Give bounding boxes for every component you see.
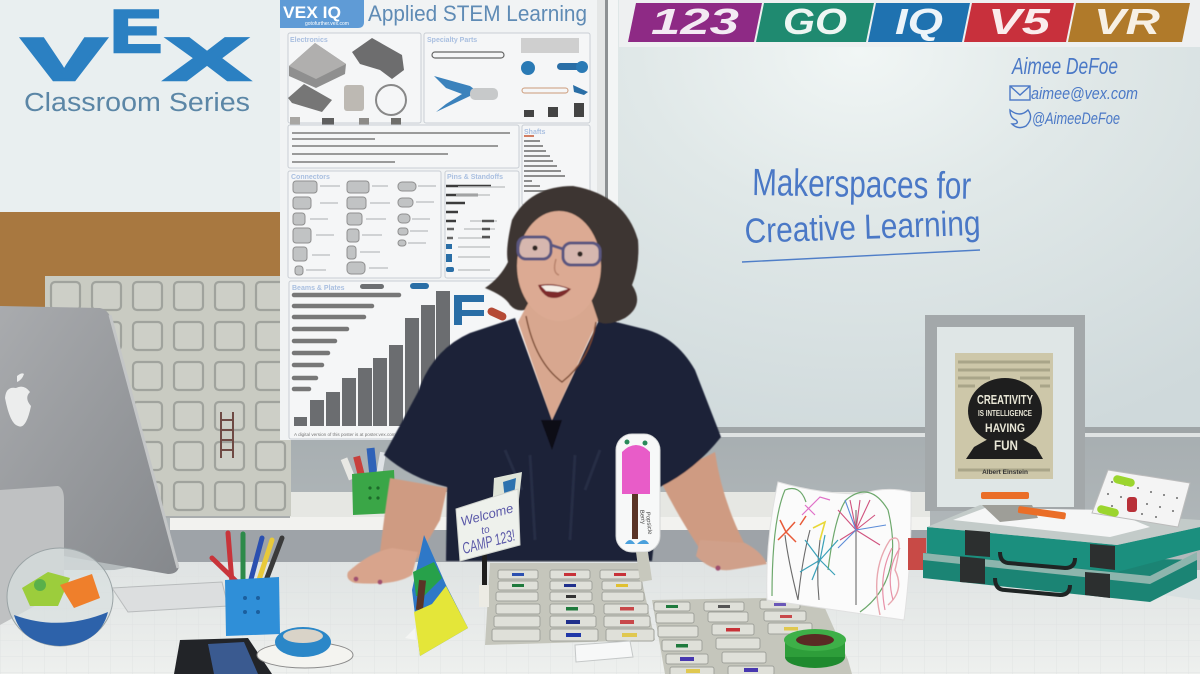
card: berry popsicle: Popsicle — [644, 512, 652, 535]
poster: Applied STEM Learning — [280, 0, 597, 440]
whiteboard title: Makerspaces for — [752, 162, 972, 208]
peg board — [1092, 470, 1190, 527]
VEX logo: V — [22, 26, 106, 93]
VEX logo: E — [110, 0, 162, 65]
poster section: Pins and Standoffs: Pins & Standoffs — [447, 174, 503, 181]
print quote: IS INTELLIGENCE — [978, 409, 1033, 418]
VEX logo: X — [165, 26, 249, 93]
tile 123 — [628, 1, 762, 42]
game board two — [652, 597, 852, 674]
whiteboard title: Creative Learning — [744, 204, 981, 251]
whiteboard contact details — [1010, 53, 1138, 128]
whiteboard — [612, 0, 1200, 432]
tile VR — [1068, 1, 1190, 42]
lower case — [923, 552, 1197, 602]
card: Welcome to Camp 123: Welcome — [459, 500, 515, 529]
poster header logo: VEX IQ — [283, 3, 341, 22]
small parts tray — [908, 538, 926, 570]
poster title: Applied STEM Learning — [368, 1, 587, 26]
lower wall — [0, 430, 1200, 570]
ladder — [221, 412, 233, 458]
poster section: Beams and Plates — [289, 281, 597, 439]
card: berry popsicle — [616, 434, 660, 552]
upper case — [927, 505, 1200, 572]
camisole — [541, 420, 562, 450]
subtitle: Classroom Series: Classroom Series — [24, 89, 250, 117]
hands over desk — [347, 540, 767, 584]
poster section: Beams and Plates: A digital version of this poster is at poster.vex.com with additional information. — [294, 432, 451, 437]
green lens — [784, 629, 846, 668]
glasses — [518, 237, 600, 265]
tile V5 — [964, 1, 1074, 42]
white shelf — [170, 492, 930, 564]
right arm — [660, 452, 745, 552]
flag post — [482, 553, 487, 603]
tile GO: GO — [783, 1, 847, 42]
screen edge highlight — [110, 315, 178, 568]
grey baseplates — [45, 276, 291, 516]
card: berry popsicle: Berry — [638, 510, 645, 524]
print attribution: Albert Einstein — [982, 469, 1028, 476]
robot flag — [492, 472, 522, 513]
screen — [0, 306, 179, 574]
tile VR: VR — [1094, 1, 1160, 42]
poster section: Shafts: Shafts — [524, 129, 546, 136]
poster section: Beams and Plates: Beams & Plates — [292, 285, 345, 292]
poster section: cables — [288, 125, 519, 168]
silhouette — [966, 378, 1043, 459]
poster section: Electronics: Electronics — [290, 37, 328, 44]
tile GO — [756, 1, 874, 42]
whiteboard title — [742, 162, 981, 262]
poster section: Electronics — [288, 33, 421, 131]
necklace — [526, 316, 596, 382]
print quote: HAVING — [985, 421, 1025, 435]
neck and chest — [518, 296, 598, 420]
card: palm tree — [412, 535, 468, 656]
print quote — [977, 392, 1033, 453]
poster section: Connectors: Connectors — [291, 174, 330, 181]
teal storage cases — [923, 470, 1200, 602]
orange tool — [981, 492, 1066, 522]
card: Welcome to Camp 123: CAMP 123! — [461, 527, 518, 558]
left arm — [380, 478, 447, 558]
eyes — [532, 245, 583, 257]
poster section: Connectors — [288, 171, 441, 278]
side hair — [596, 225, 616, 262]
blue sensor on disc — [257, 627, 353, 668]
card: Welcome to Camp 123 — [456, 472, 522, 607]
stand — [0, 486, 64, 625]
dress — [384, 318, 721, 561]
presenter — [380, 186, 745, 561]
email: aimee@vex.com — [1031, 84, 1138, 103]
iMac computer — [0, 306, 228, 625]
poster section: Specialty Parts: Specialty Parts — [427, 37, 477, 44]
framed Einstein print — [925, 315, 1085, 511]
green marker cube — [341, 448, 396, 515]
corkboard — [0, 212, 286, 308]
product color bar — [619, 0, 1200, 47]
desk — [0, 562, 1200, 674]
card: Welcome to Camp 123: to — [480, 524, 491, 537]
poster section: Pins and Standoffs — [445, 171, 519, 278]
left wall — [0, 308, 290, 518]
poster section: Shafts — [522, 125, 590, 205]
game board one — [485, 563, 655, 645]
tile IQ — [868, 1, 970, 42]
print quote: CREATIVITY — [977, 392, 1033, 407]
sign: VEX Classroom Series panel — [0, 0, 282, 212]
nose and mouth — [538, 259, 571, 298]
firework drawing — [767, 482, 911, 620]
tile IQ: IQ — [895, 1, 943, 42]
phone — [174, 638, 272, 674]
apple logo — [5, 373, 31, 427]
tile 123: 123 — [651, 1, 739, 42]
blue pencil cube — [212, 533, 282, 636]
paper on case — [953, 508, 1150, 537]
poster header logo — [280, 0, 364, 28]
print quote: FUN — [994, 437, 1018, 453]
tile V5: V5 — [988, 1, 1051, 42]
poster section: Specialty Parts — [424, 33, 590, 123]
face — [517, 211, 601, 321]
keyboard — [112, 582, 228, 612]
folded white paper — [575, 641, 633, 662]
VEX logo — [22, 0, 249, 93]
presenter name: Aimee DeFoe — [1010, 53, 1118, 79]
post for popsicle — [636, 552, 652, 582]
twitter handle: @AimeeDeFoe — [1032, 109, 1120, 128]
hair — [485, 186, 638, 324]
whiteboard frame strip — [597, 0, 618, 440]
whiteboard tray rail — [716, 427, 1200, 437]
card base — [405, 628, 416, 640]
fishbowl — [7, 548, 113, 646]
poster header logo: gotofurther.vex.com — [305, 21, 349, 27]
